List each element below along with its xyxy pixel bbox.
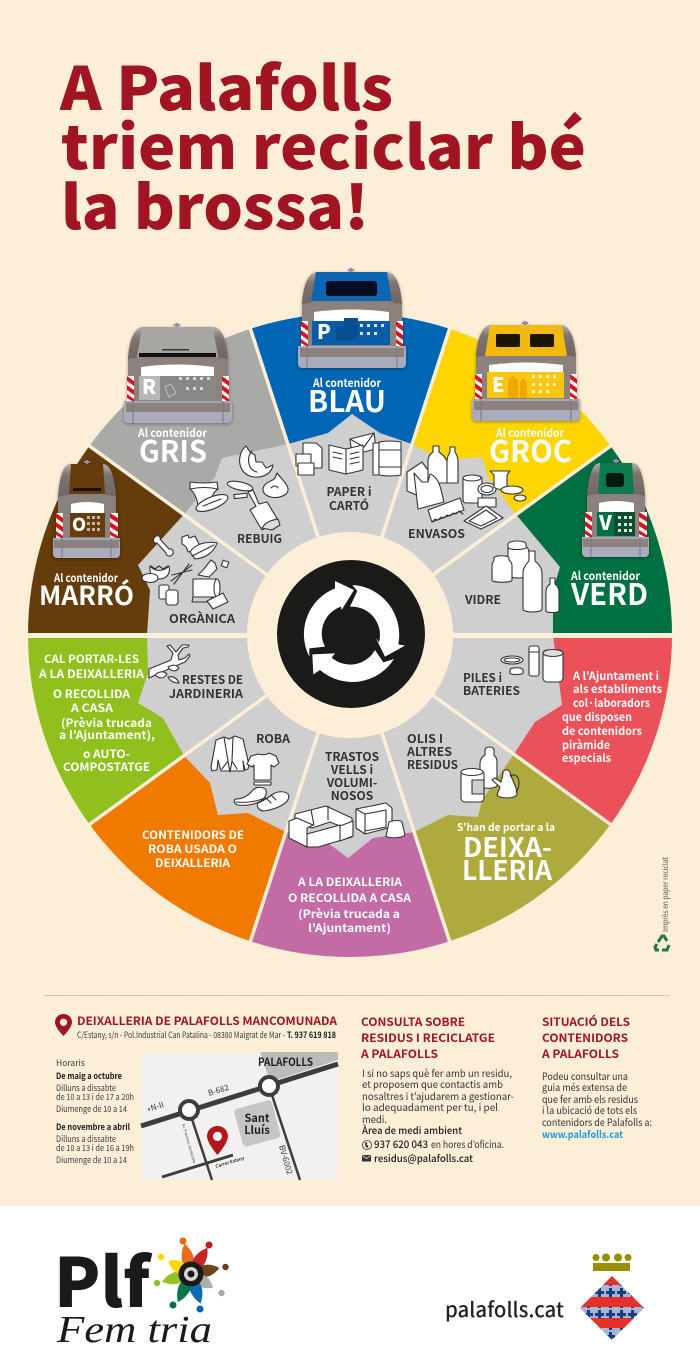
consulta body text: residus@palafolls.cat <box>374 1150 473 1165</box>
label: paper i cartró: CARTÓ <box>329 497 369 514</box>
text: red sector instructions <box>562 668 663 766</box>
label: olis i altres residus: RESIDUS <box>407 756 458 773</box>
text: purple sector instructions: A LA DEIXALLERIA <box>297 874 403 890</box>
label: orgànica: ORGÀNICA <box>169 610 235 627</box>
recycling wheel <box>26 313 674 957</box>
opening hours: de 10 a 13 i de 17 a 20h <box>56 1091 134 1103</box>
icon: location pin <box>55 1014 72 1036</box>
heading: situació: SITUACIÓ DELS <box>542 1014 630 1030</box>
text: lime sector instructions: A CASA <box>70 700 114 716</box>
text: lime sector instructions: (Prèvia trucada <box>61 715 152 731</box>
label: trastos vells i voluminosos: VOLUMI- <box>326 774 377 791</box>
label: olis i altres residus: OLIS I <box>407 730 443 747</box>
text: lime sector instructions: O RECOLLIDA <box>53 686 131 702</box>
text: lime sector instructions <box>38 651 155 775</box>
title: triem reciclar bé <box>61 100 586 187</box>
label: piles i bateries: PILES i <box>463 669 502 686</box>
coat of arms <box>578 1254 646 1342</box>
situació body text: www.palafolls.cat <box>542 1126 624 1141</box>
bin: marró: O <box>72 511 86 537</box>
label: trastos vells i voluminosos <box>325 748 379 804</box>
text: orange sector instructions: ROBA USADA O <box>148 841 237 857</box>
icons: batteries <box>501 646 563 682</box>
opening hours <box>56 1057 134 1166</box>
text: orange sector instructions: DEIXALLERIA <box>155 855 231 871</box>
consulta body text: medi. <box>362 1111 387 1126</box>
bin: blau: P <box>317 316 331 345</box>
inner grey areas <box>138 414 562 858</box>
text: orange sector instructions <box>142 827 244 871</box>
heading: verd: Al contenidor <box>570 568 641 584</box>
opening hours: Diumenge de 10 a 14 <box>56 1154 127 1166</box>
icon: recycling <box>655 936 669 950</box>
label: envasos: ENVASOS <box>408 525 465 542</box>
label: paper i cartró: PAPER i <box>327 483 371 500</box>
icons: organic waste <box>142 535 229 609</box>
text: lime sector instructions: CAL PORTAR-LES <box>44 651 139 667</box>
heading: situació <box>541 1014 630 1062</box>
label: vidre: VIDRE <box>464 591 501 608</box>
logo star <box>154 1238 229 1312</box>
label: piles i bateries: BATERIES <box>463 682 520 699</box>
text: olive sector instructions: S’han de portar a la <box>457 820 555 835</box>
icons: packaging <box>407 446 526 529</box>
panel: situació <box>541 1014 652 1141</box>
location map: PALAFOLLS <box>258 1054 313 1070</box>
credit: recycled paper: Imprès en paper reciclat <box>660 857 671 932</box>
situació body text: que fer amb els residus <box>542 1091 638 1106</box>
panel: consulta <box>360 1014 515 1165</box>
bin: verd <box>582 459 649 557</box>
logo: Plf Fem tria: Plf <box>54 1228 153 1327</box>
label: trastos vells i voluminosos: TRASTOS <box>325 748 379 765</box>
heading: consulta: RESIDUS I RECICLATGE <box>361 1030 495 1046</box>
text: purple sector instructions: l’Ajuntament) <box>308 920 391 936</box>
sector dividers <box>26 326 674 944</box>
website: palafolls.cat <box>445 1293 564 1323</box>
sector colours <box>28 313 672 957</box>
label: roba: ROBA <box>256 730 290 747</box>
text: red sector instructions: col·laboradors <box>573 695 651 711</box>
label: restes de jardineria: JARDINERIA <box>169 685 243 702</box>
heading: marró: Al contenidor <box>53 570 118 586</box>
location map: Lluís <box>244 1122 270 1138</box>
location map: Av. Francesc Santacana <box>180 1123 197 1164</box>
text: olive sector instructions: LLERIA <box>462 849 553 888</box>
heading: deixalleria: DEIXALLERIA DE PALAFOLLS MANCOMUNADA <box>77 1013 338 1029</box>
label: restes de jardineria: RESTES DE <box>182 671 243 688</box>
icons: clothes <box>211 736 289 811</box>
consulta body text: lo adequadament per tu, i pel <box>362 1099 498 1114</box>
heading: blau: Al contenidor <box>312 375 382 391</box>
text: red sector instructions: A l’Ajuntament i <box>572 668 659 684</box>
divider <box>45 994 670 996</box>
icon: telephone <box>362 1140 372 1150</box>
consulta body text <box>362 1065 515 1165</box>
heading: verd: VERD <box>570 570 648 614</box>
bin: groc: E <box>492 369 505 398</box>
text: red sector instructions: que disposen <box>562 709 632 725</box>
label: piles i bateries <box>463 669 520 699</box>
heading: groc: Al contenidor <box>495 425 565 441</box>
heading: groc: GROC <box>489 427 572 471</box>
heading: consulta: A PALAFOLLS <box>360 1046 438 1062</box>
text: red sector instructions: de contenidors <box>562 723 643 739</box>
text: purple sector instructions: O RECOLLIDA A CASA <box>288 890 412 906</box>
heading: situació: CONTENIDORS <box>542 1030 628 1046</box>
location map: «N-II <box>146 1099 165 1115</box>
consulta body text: I si no saps què fer amb un residu, <box>362 1065 512 1080</box>
location map: Sant <box>244 1110 270 1126</box>
location map: B-682 <box>207 1082 231 1099</box>
central hub <box>247 532 453 738</box>
opening hours: De maig a octubre <box>56 1070 122 1082</box>
consulta body text: Àrea de medi ambient <box>362 1122 462 1137</box>
footer band <box>0 1206 700 1347</box>
bin: marró <box>53 460 120 558</box>
text: olive sector instructions <box>457 820 555 888</box>
text: red sector instructions: especials <box>562 750 612 766</box>
credit: recycled paper <box>655 857 671 950</box>
icons: paper and cardboard <box>296 433 401 476</box>
opening hours: Dilluns a dissabte <box>56 1133 116 1145</box>
opening hours: Dilluns a dissabte <box>56 1082 116 1094</box>
text: lime sector instructions: o AUTO- <box>83 746 130 762</box>
label: trastos vells i voluminosos: NOSOS <box>331 787 373 804</box>
address: T. 937 619 818 <box>287 1029 336 1041</box>
opening hours: Horaris <box>56 1057 85 1069</box>
title: la brossa! <box>61 160 369 247</box>
icons: glass <box>492 541 559 612</box>
icons: furniture <box>289 803 405 847</box>
location map: BV-6002 <box>276 1144 295 1176</box>
bin: blau <box>298 268 406 368</box>
address: C/Estany, s/n - Pol.Industrial Can Patalina - 08380 Malgrat de Mar - <box>77 1029 285 1041</box>
text: lime sector instructions: a l’Ajuntament), <box>59 727 155 743</box>
situació body text: contenidors de Palafolls a: <box>542 1114 652 1129</box>
text: purple sector instructions <box>288 874 412 936</box>
text: lime sector instructions: COMPOSTATGE <box>63 759 150 775</box>
text: orange sector instructions: CONTENIDORS DE <box>142 827 244 843</box>
heading: gris: GRIS <box>139 427 207 471</box>
heading: blau: BLAU <box>308 377 386 421</box>
label: restes de jardineria <box>169 671 243 702</box>
bin: gris: R <box>142 371 156 400</box>
opening hours: Diumenge de 10 a 14 <box>56 1103 127 1115</box>
title <box>59 41 586 247</box>
icon: map pin <box>207 1126 228 1155</box>
heading: marró: MARRÓ <box>39 576 134 613</box>
title: A Palafolls <box>59 41 393 128</box>
situació body text <box>542 1068 652 1141</box>
situació body text: guia més extensa de <box>542 1079 627 1094</box>
location map <box>141 1052 338 1180</box>
label: trastos vells i voluminosos: VELLS i <box>330 761 373 778</box>
text: olive sector instructions: DEIXA- <box>463 826 552 865</box>
icon: envelope <box>362 1155 371 1162</box>
consulta body text: et proposem que contactis amb <box>362 1076 503 1091</box>
text: purple sector instructions: (Prèvia trucada a <box>298 906 400 922</box>
situació body text: i la ubicació de tots els <box>542 1102 637 1117</box>
consulta body text: en hores d’oficina. <box>431 1136 504 1151</box>
logo: Plf Fem tria <box>54 1228 229 1347</box>
label: rebuig: REBUIG <box>237 530 282 547</box>
consulta body text: 937 620 043 <box>374 1136 428 1151</box>
consulta body text: nosaltres i t’ajudarem a gestionar- <box>362 1088 515 1103</box>
heading: consulta <box>360 1014 495 1062</box>
opening hours: de 10 a 13 i de 16 a 19h <box>56 1142 134 1154</box>
icons: oils and other waste <box>461 747 519 802</box>
bin: groc <box>472 321 580 421</box>
icons: general waste <box>190 446 288 530</box>
opening hours: De novembre a abril <box>56 1121 130 1133</box>
situació body text: Podeu consultar una <box>542 1068 628 1083</box>
text: red sector instructions: piràmide <box>562 737 610 753</box>
label: olis i altres residus: ALTRES <box>406 743 452 760</box>
text: red sector instructions: als establiments <box>573 681 663 697</box>
heading: situació: A PALAFOLLS <box>541 1046 619 1062</box>
icons: garden waste <box>149 645 190 683</box>
heading: gris: Al contenidor <box>137 425 208 441</box>
bin: gris <box>124 323 232 423</box>
location map: Carrer Estany <box>215 1155 246 1170</box>
heading: consulta: CONSULTA SOBRE <box>361 1014 465 1030</box>
label: olis i altres residus <box>406 730 458 773</box>
bin: verd: V <box>598 507 613 536</box>
text: lime sector instructions: A LA DEIXALLERIA <box>38 666 145 682</box>
panel: deixalleria <box>55 1013 338 1180</box>
